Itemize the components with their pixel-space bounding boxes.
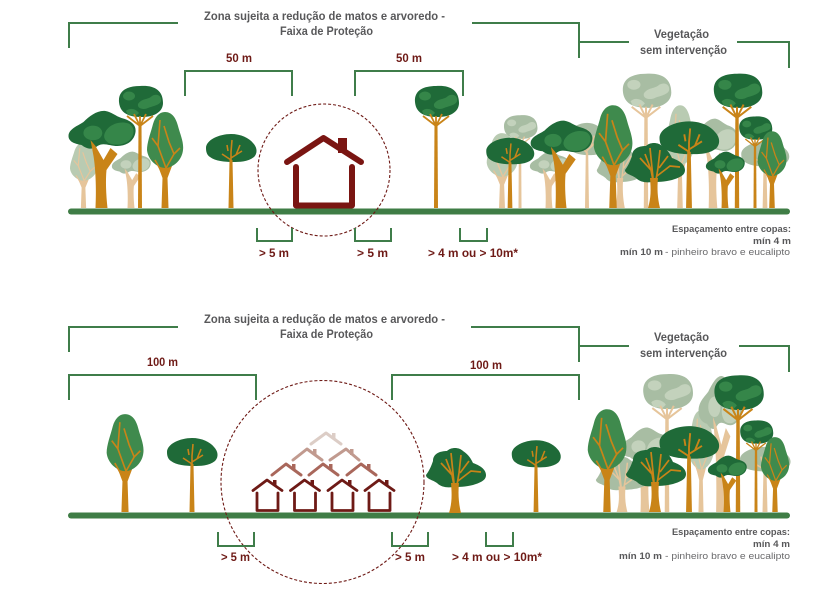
spacing brackets bbox=[257, 228, 487, 241]
note: crown spacing bbox=[620, 224, 791, 258]
bracket: left 100 m bbox=[69, 375, 256, 400]
panel: bottom diagram (100 m) bbox=[69, 312, 791, 584]
note: crown spacing: Espaçamento entre copas: bbox=[672, 224, 791, 235]
note: crown spacing: mín 10 m bbox=[619, 551, 662, 562]
trees: left group bbox=[68, 86, 183, 208]
bracket: right 50 m bbox=[355, 71, 463, 96]
title: faixa de proteção: Zona sujeita a redução de matos e arvoredo - bbox=[204, 9, 445, 23]
note: crown spacing bbox=[619, 527, 790, 562]
circle: house zone bbox=[258, 104, 390, 236]
spacing brackets bbox=[218, 532, 513, 546]
spacing labels: > 5 m bbox=[395, 550, 425, 564]
note: crown spacing: mín 4 m bbox=[753, 236, 791, 247]
tree: flat crown left bbox=[167, 438, 218, 512]
title: faixa de proteção bbox=[204, 312, 445, 341]
bracket: left 50 m bbox=[185, 71, 292, 96]
note: crown spacing: Espaçamento entre copas: bbox=[672, 527, 790, 538]
bracket: vegetation without intervention bbox=[737, 42, 789, 68]
ground line bbox=[71, 512, 787, 518]
tree: bushy crown bbox=[426, 448, 486, 513]
icon: house bbox=[287, 138, 361, 206]
title: faixa de proteção: Faixa de Proteção bbox=[280, 24, 373, 38]
heading: vegetação sem intervenção: sem intervenção bbox=[640, 43, 727, 57]
spacing labels bbox=[259, 246, 518, 260]
bracket: protection strip bbox=[69, 23, 629, 58]
tree: pine right of house bbox=[415, 86, 459, 208]
title: faixa de proteção: Faixa de Proteção bbox=[280, 327, 373, 341]
label: right 50 m: 50 m bbox=[396, 51, 422, 65]
title: faixa de proteção: Zona sujeita a redução de matos e arvoredo - bbox=[204, 312, 445, 326]
circle: settlement zone bbox=[221, 380, 424, 584]
ground line bbox=[71, 208, 787, 214]
note: crown spacing: mín 4 m bbox=[753, 539, 790, 550]
label: left 50 m: 50 m bbox=[226, 51, 252, 65]
spacing labels bbox=[221, 550, 542, 564]
spacing labels: > 4 m ou > 10m* bbox=[452, 550, 542, 564]
heading: vegetação sem intervenção: sem intervenção bbox=[640, 346, 727, 360]
bracket: protection strip bbox=[69, 327, 629, 362]
note: crown spacing: - pinheiro bravo e eucalipto bbox=[665, 247, 790, 258]
panel: top diagram (50 m) bbox=[68, 9, 791, 260]
tree: oval left bbox=[107, 414, 144, 512]
icon: settlement of houses bbox=[253, 433, 394, 510]
label: left 100 m: 100 m bbox=[147, 355, 178, 369]
label: right 100 m: 100 m bbox=[470, 358, 502, 372]
trees: unmanaged vegetation cluster bbox=[588, 374, 791, 512]
note: crown spacing: - pinheiro bravo e eucalipto bbox=[665, 551, 790, 562]
heading: vegetação sem intervenção bbox=[640, 27, 727, 57]
note: crown spacing: mín 10 m bbox=[620, 247, 663, 258]
spacing labels: > 5 m bbox=[221, 550, 250, 564]
tree: flat crown left bbox=[206, 134, 257, 208]
bracket: right 100 m bbox=[392, 375, 579, 400]
title: faixa de proteção bbox=[204, 9, 445, 38]
spacing labels: > 5 m bbox=[357, 246, 388, 260]
heading: vegetação sem intervenção: Vegetação bbox=[654, 330, 709, 344]
trees: unmanaged vegetation cluster bbox=[486, 74, 789, 208]
heading: vegetação sem intervenção bbox=[640, 330, 727, 360]
spacing labels: > 4 m ou > 10m* bbox=[428, 246, 518, 260]
heading: vegetação sem intervenção: Vegetação bbox=[654, 27, 709, 41]
bracket: vegetation without intervention bbox=[739, 346, 789, 372]
spacing labels: > 5 m bbox=[259, 246, 289, 260]
tree: flat crown right bbox=[512, 440, 561, 512]
